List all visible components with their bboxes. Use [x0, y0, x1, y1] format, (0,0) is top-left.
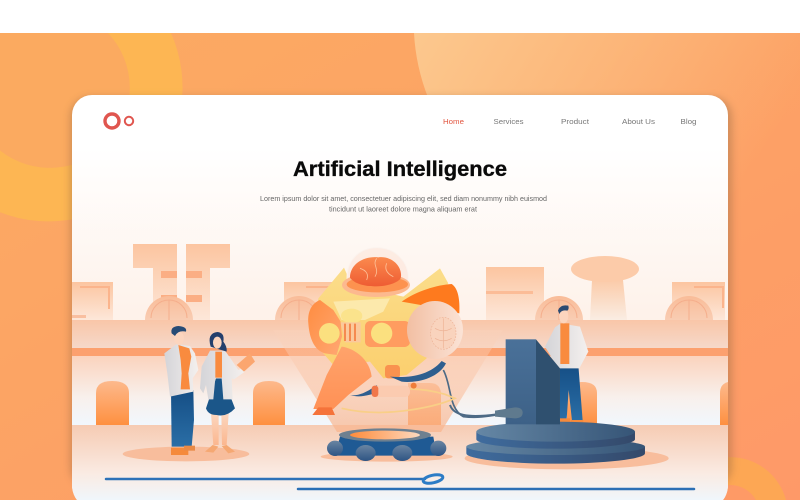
description: tincidunt ut laoreet dolore magna aliquam erat [329, 204, 477, 214]
navigation: Home [443, 117, 464, 126]
platform shadow [464, 451, 669, 470]
ring [342, 389, 455, 412]
shadow [123, 447, 249, 461]
arches [96, 381, 728, 425]
cable [443, 370, 500, 417]
navigation [444, 118, 696, 126]
navigation: About Us [622, 117, 655, 126]
blue floor lines [106, 473, 694, 489]
trunk arm [312, 347, 372, 415]
head body [308, 268, 459, 378]
title: Artificial Intelligence [293, 157, 507, 181]
base shadow [320, 454, 452, 462]
plug [450, 405, 523, 418]
woman [200, 332, 255, 453]
man [164, 326, 198, 455]
navigation: Services [494, 117, 524, 126]
description: Lorem ipsum dolor sit amet, consectetuer adipiscing elit, sed diam nonummy nibh euismod [260, 194, 547, 203]
card shadow [70, 97, 732, 487]
base [327, 428, 446, 461]
skyline buildings left [72, 244, 338, 320]
skyline buildings right [486, 256, 725, 320]
gauges [145, 296, 713, 320]
lower wall [72, 356, 728, 425]
platform [466, 422, 645, 464]
robot on hologram base [308, 248, 500, 462]
ear disk with brain icon [407, 301, 463, 359]
landing page card [72, 95, 728, 500]
brain dome [342, 248, 410, 297]
yellow eyes [319, 323, 392, 344]
navigation: Product [561, 117, 590, 126]
orange strip [72, 348, 728, 356]
monitor [506, 339, 560, 424]
navigation: Blog [680, 117, 696, 126]
engineer [545, 305, 588, 425]
description [260, 196, 546, 213]
floor [72, 425, 728, 500]
scientists: man and woman [123, 326, 255, 461]
logo [105, 114, 133, 128]
upper wall band [72, 320, 728, 348]
hoses [350, 361, 446, 397]
control machine and engineer [450, 305, 669, 469]
hologram beam [284, 347, 492, 432]
